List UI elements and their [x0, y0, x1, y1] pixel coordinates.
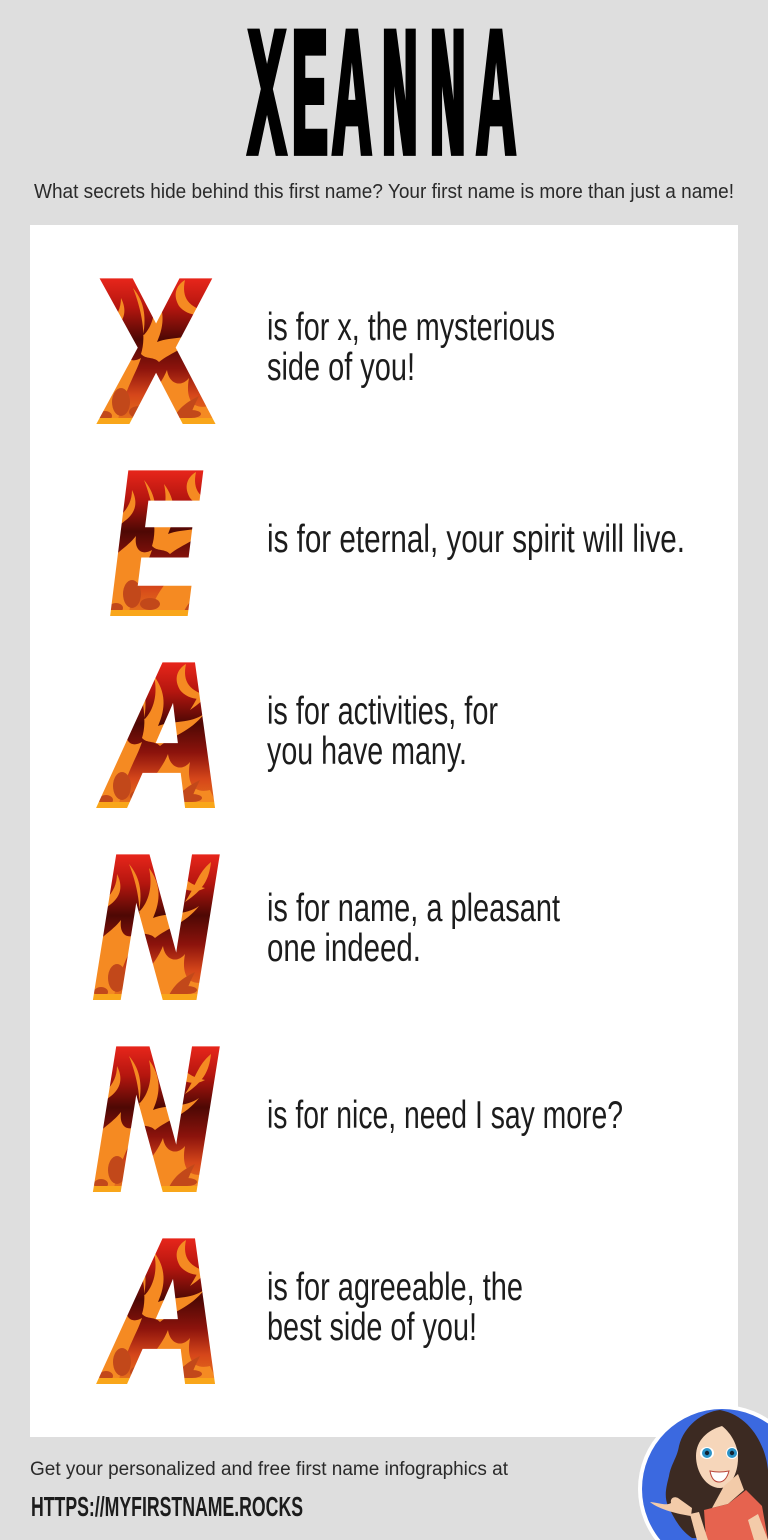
icon: flaming letter A: A: [101, 1200, 223, 1423]
row: second letter N: [94, 1008, 623, 1231]
panel background: [30, 225, 738, 1437]
icon: avatar: [638, 1405, 768, 1540]
text: X meaning: side of you!: [267, 346, 415, 389]
text: A meaning: you have many.: [267, 730, 467, 773]
subtitle: What secrets hide behind this first name? Your first name is more than just a name!: [34, 181, 734, 203]
row: letter A: [101, 624, 498, 847]
text: second N meaning: is for nice, need I say more?: [267, 1094, 623, 1137]
text: A meaning: [267, 690, 498, 773]
icon: flaming letter N: N: [94, 816, 216, 1039]
text: N meaning: is for name, a pleasant: [267, 887, 560, 930]
text: X meaning: is for x, the mysterious: [267, 306, 555, 349]
row: second letter A: [101, 1200, 523, 1423]
text: second A meaning: best side of you!: [267, 1306, 477, 1349]
row: letter N: [94, 816, 560, 1039]
text: N meaning: one indeed.: [267, 927, 421, 970]
icon: flaming letter E: E: [111, 432, 201, 655]
title: XEANNA: [248, 1, 515, 209]
footer prompt: Get your personalized and free first name infographics at: [30, 1459, 509, 1480]
text: second A meaning: is for agreeable, the: [267, 1266, 523, 1309]
text: A meaning: is for activities, for: [267, 690, 498, 733]
row: letter X: [101, 240, 555, 463]
text: N meaning: [267, 887, 560, 970]
panel: letter meanings: [30, 225, 738, 1437]
icon: flaming letter A: A: [101, 624, 223, 847]
text: second A meaning: [267, 1266, 523, 1349]
icon: flaming letter N: N: [94, 1008, 216, 1231]
footer url: HTTPS://MYFIRSTNAME.ROCKS: [31, 1491, 303, 1522]
icon: flaming letter X: X: [101, 240, 211, 463]
text: X meaning: [267, 306, 555, 389]
row: letter E: [111, 432, 685, 655]
